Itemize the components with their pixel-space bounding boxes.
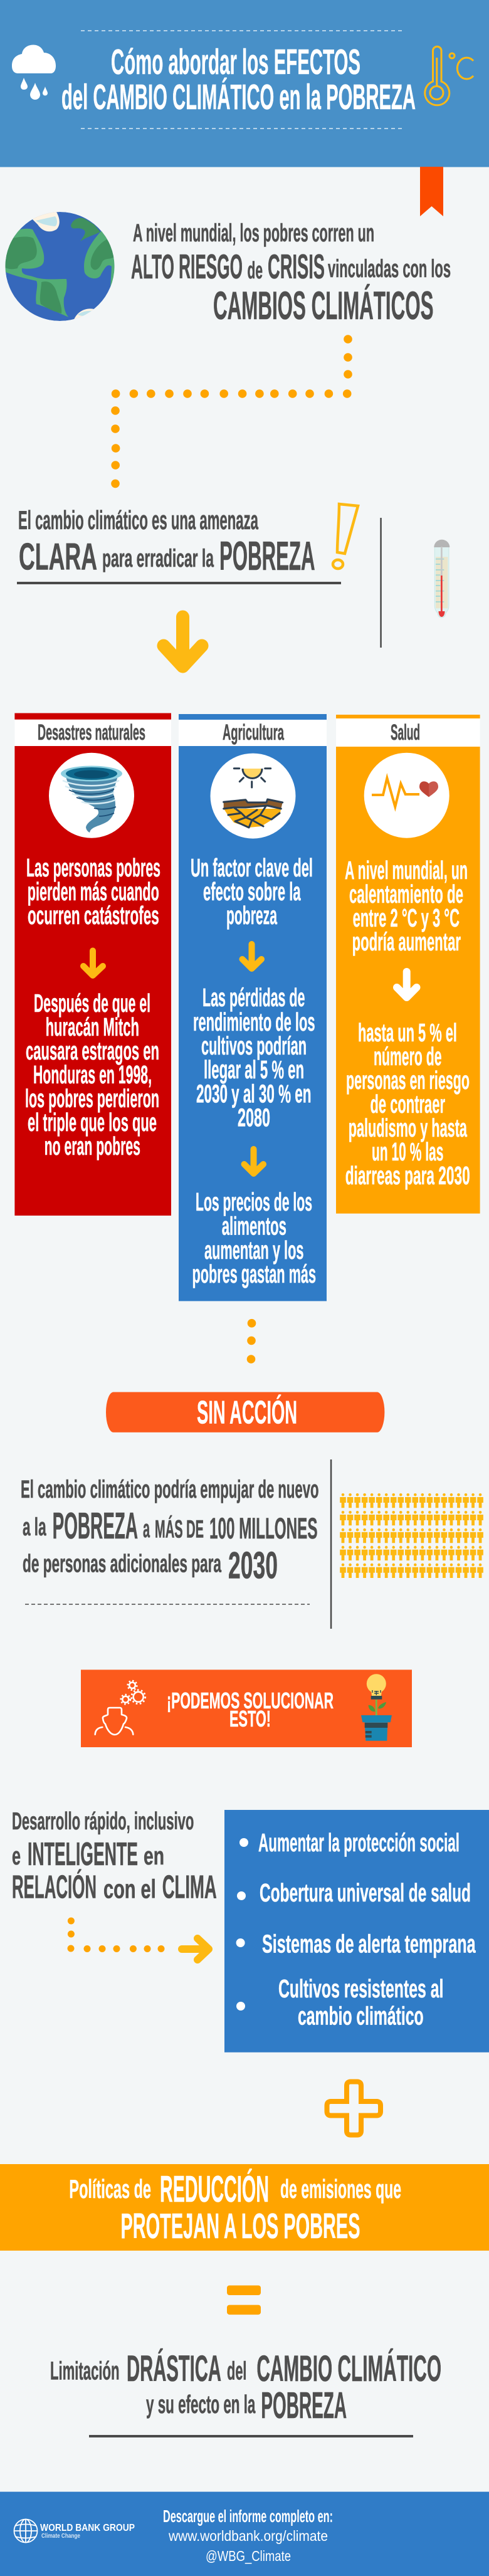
text: causara estragos en — [26, 1036, 159, 1065]
panel: actions list — [224, 1810, 489, 2053]
text: ¡PODEMOS SOLUCIONAR — [167, 1688, 334, 1713]
result statement: y su efecto en la — [146, 2390, 256, 2419]
text: Honduras en 1998, — [33, 1060, 152, 1089]
panel: agriculture — [179, 714, 327, 1301]
text: Después de que el — [34, 989, 150, 1017]
text: Las personas pobres — [26, 853, 160, 882]
logo: World Bank Group: WORLD BANK GROUP — [40, 2523, 135, 2533]
poverty statement: a — [143, 1515, 150, 1543]
pill: no action: SIN ACCIÓN — [197, 1394, 297, 1431]
text — [167, 1688, 334, 1732]
text: llegar al 5 % en — [204, 1055, 304, 1084]
logo: World Bank Group: Climate Change — [41, 2533, 80, 2540]
icon: pulse and heart — [364, 753, 450, 838]
poverty statement: a la — [23, 1513, 46, 1541]
poverty statement: 100 MILLONES — [209, 1511, 317, 1545]
icon: globe — [0, 210, 119, 321]
text — [191, 853, 313, 930]
poverty statement: POBREZA — [53, 1505, 138, 1547]
band: emission policies: Políticas de — [69, 2174, 151, 2204]
icon: lightbulb plant — [361, 1674, 392, 1741]
icon: thermometer — [434, 540, 450, 618]
panel: natural disasters — [14, 713, 171, 1216]
arrow — [244, 1149, 263, 1174]
banner: we can solve this — [81, 1669, 412, 1747]
text: huracán Mitch — [46, 1012, 139, 1041]
dotted connector — [111, 335, 352, 488]
intro text — [131, 219, 451, 328]
pill: no action — [106, 1392, 384, 1433]
dotted connector — [247, 1319, 256, 1364]
icon: exclamation mark — [333, 504, 358, 569]
ribbon bookmark — [420, 167, 443, 216]
text: 2030 y al 30 % en — [196, 1080, 311, 1108]
arrow — [242, 944, 261, 969]
footer — [0, 2492, 489, 2576]
smart development text: CLIMA — [162, 1869, 217, 1906]
threat statement — [17, 505, 341, 584]
heading: Agricultura — [223, 720, 284, 745]
smart development text — [12, 1808, 217, 1906]
divider with thermometer — [380, 518, 450, 648]
text: Un factor clave del — [191, 853, 313, 882]
smart development text: e — [12, 1843, 21, 1870]
download text — [163, 2506, 333, 2564]
text — [193, 983, 315, 1132]
text — [25, 989, 159, 1160]
text: alimentos — [222, 1212, 287, 1241]
result statement: DRÁSTICA — [127, 2348, 221, 2389]
text — [192, 1187, 316, 1288]
text: pobres gastan más — [192, 1259, 316, 1288]
icon grid: 100 people — [340, 1493, 483, 1578]
result statement — [50, 2348, 441, 2437]
intro text: de — [247, 258, 263, 284]
text: efecto sobre la — [203, 877, 301, 906]
download text: www.worldbank.org/climate — [168, 2528, 328, 2544]
header banner — [0, 0, 489, 167]
smart development text: RELACIÓN — [12, 1869, 97, 1906]
text: los pobres perdieron — [25, 1084, 159, 1113]
threat statement: POBREZA — [219, 533, 315, 579]
text: ESTO! — [229, 1706, 271, 1732]
dotted arrow — [68, 1917, 209, 1960]
smart development text: Desarrollo rápido, inclusivo — [12, 1808, 194, 1835]
smart development text: INTELIGENTE — [28, 1836, 138, 1873]
heading: Desastres naturales — [38, 720, 145, 745]
text: Las pérdidas de — [202, 983, 305, 1012]
text: ocurren catástrofes — [28, 901, 159, 930]
big arrow down — [164, 617, 202, 666]
result statement: del — [227, 2356, 247, 2385]
icon: equals — [227, 2286, 261, 2315]
intro text: ALTO RIESGO — [131, 247, 243, 286]
threat statement: para erradicar la — [102, 545, 214, 572]
arrow — [397, 972, 416, 997]
text: 2080 — [238, 1103, 270, 1132]
icon: plus — [327, 2081, 381, 2135]
title — [61, 42, 416, 117]
text: Los precios de los — [196, 1187, 312, 1216]
smart development text: en — [144, 1843, 164, 1870]
result statement: Limitación — [50, 2356, 119, 2385]
text: el triple que los que — [28, 1108, 157, 1137]
intro text: CRISIS — [268, 247, 325, 286]
band: emission policies: REDUCCIÓN — [160, 2169, 269, 2210]
download text: Descargue el informe completo en: — [163, 2506, 333, 2526]
text — [345, 1018, 470, 1190]
panel: health — [336, 715, 480, 1214]
icon: sun and cracked earth — [211, 754, 296, 839]
text: rendimiento de los — [193, 1007, 315, 1036]
text: no eran pobres — [45, 1132, 140, 1160]
threat statement: El cambio climático es una amenaza — [18, 505, 258, 535]
result statement: POBREZA — [261, 2385, 347, 2426]
text: pierden más cuando — [28, 877, 159, 906]
panel: health: Salud — [391, 720, 420, 745]
icon: person with gears — [95, 1681, 145, 1735]
poverty statement — [21, 1476, 318, 1604]
icon: tornado — [49, 753, 134, 838]
icon: thermometer with degrees — [425, 46, 473, 105]
band: emission policies — [0, 2164, 489, 2251]
text — [345, 856, 468, 956]
poverty statement: MÁS DE — [155, 1515, 204, 1543]
text — [26, 853, 160, 930]
poverty statement: 2030 — [228, 1544, 278, 1586]
smart development text: con el — [103, 1874, 156, 1904]
arrow — [83, 950, 103, 975]
download text: @WBG_Climate — [206, 2548, 291, 2564]
threat statement: CLARA — [19, 535, 97, 578]
logo: World Bank Group — [14, 2519, 135, 2543]
text: aumentan y los — [204, 1236, 303, 1264]
icon: rain cloud — [12, 45, 56, 100]
text: cultivos podrían — [201, 1031, 307, 1060]
text: pobreza — [226, 901, 278, 930]
poverty statement: de personas adicionales para — [23, 1550, 221, 1578]
